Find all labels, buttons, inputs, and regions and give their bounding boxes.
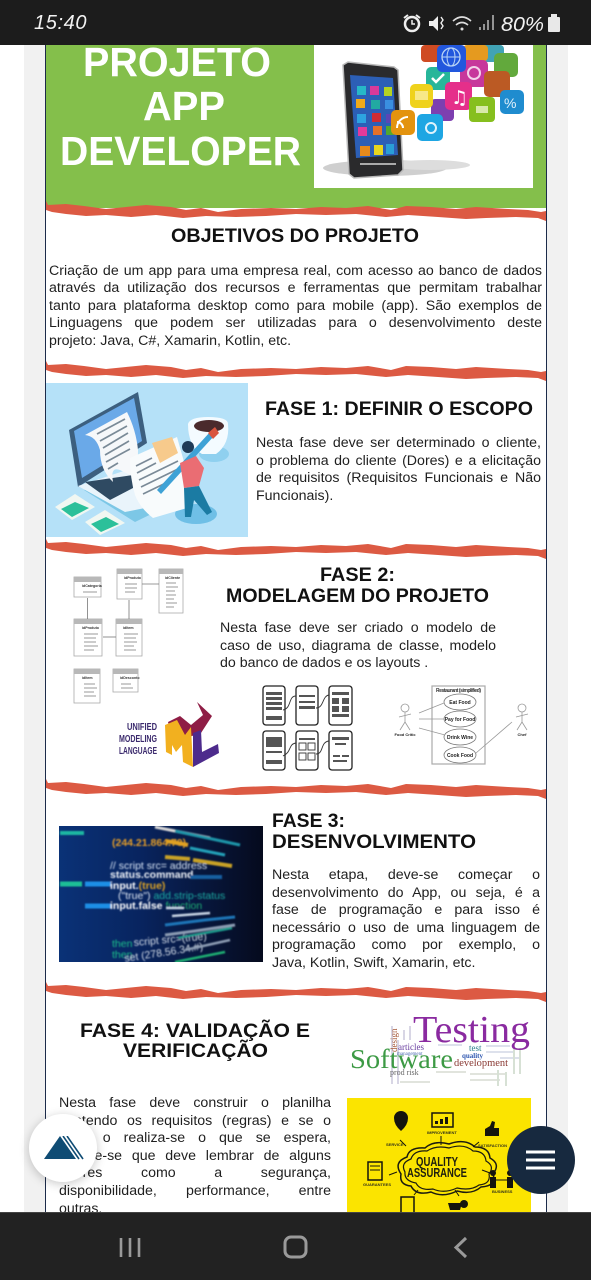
diagram: database tables: idProduto (124, 576, 142, 580)
title: Projeto App Developer: APP (143, 83, 225, 129)
diagram: database tables (74, 568, 184, 704)
image: quality assurance (347, 1098, 531, 1212)
heading: objetivos do projeto: OBJETIVOS DO PROJETO (171, 226, 419, 247)
navigation icons (120, 1236, 467, 1258)
image: quality assurance: SATISFACTION (478, 1143, 507, 1148)
image: quality assurance: QUALITY (416, 1155, 459, 1169)
floating menu button (507, 1126, 575, 1194)
text: fase 4 body: teste o realiza-se o que se espera, (59, 1130, 331, 1146)
text: fase 3 body: necessário o uso de uma linguagem de (272, 920, 540, 936)
image: software testing word cloud: management (397, 1052, 423, 1057)
logo: UML (119, 702, 219, 767)
image: code on screen: status.command (110, 869, 193, 881)
panel: objetivos do projeto (49, 226, 542, 349)
text: fase 1 body: Funcionais). (256, 488, 333, 504)
text: fase 2 body (220, 620, 496, 671)
image: code on screen: ("true") add.strip-status (118, 890, 225, 902)
status icons: 80% (501, 14, 544, 36)
text: fase 3 body (272, 867, 540, 971)
text: fase 3 body: programação como por exemplo, o (272, 937, 540, 953)
image: software testing word cloud: quality (462, 1052, 484, 1060)
image: software testing word cloud: Software (350, 1044, 453, 1074)
heading: fase 2: MODELAGEM DO PROJETO (226, 586, 489, 607)
text: fase 1 body (256, 435, 541, 504)
icon: hamburger menu (526, 1150, 555, 1170)
text: fase 1 body: de requisitos (Requisitos Funcionais e Não (256, 470, 541, 486)
title: Projeto App Developer (60, 45, 301, 170)
image: code on screen: input.false function (110, 900, 202, 912)
text: fase 4 body: lembre-se que deve lembrar de alguns (59, 1148, 331, 1164)
diagram: use case: Food Critic (394, 732, 416, 737)
panel: fase 4 (59, 1014, 531, 1217)
wireframe: phone layouts (262, 685, 353, 771)
diagram: database tables: idCategoria (82, 584, 103, 588)
image: quality assurance: ASSURANCE (407, 1166, 467, 1180)
panel: fase 2 (74, 565, 528, 771)
panel: header (60, 45, 533, 188)
image: quality assurance: SERVICE (386, 1142, 404, 1147)
image: code on screen: input.(true) (110, 880, 165, 892)
heading: fase 3 (272, 811, 476, 853)
icon: triangle logo (44, 1136, 84, 1160)
image: code on screen: script src=(true) (133, 931, 207, 949)
text: fase 2 body: do banco de dados e os layouts . (220, 655, 428, 671)
image: code on screen: // script src= address (110, 860, 207, 872)
diagram: database tables: idItem (123, 626, 134, 630)
image: software testing word cloud: design (389, 1028, 399, 1052)
image: smartphone with app icons: ♫ (451, 87, 468, 109)
panel: fase 1 (46, 383, 541, 537)
text: objetivos body: projeto: Java, C#, Xamarin, Kotlin, etc. (49, 333, 291, 349)
diagram: database tables: idDesconto (120, 676, 140, 680)
diagram: database tables: idCliente (165, 576, 180, 580)
logo: UML: MODELING (119, 734, 157, 745)
illustration: person writing on document over laptop (46, 383, 248, 537)
text: objetivos body: tanto para plataforma desktop como para mobile (app). São exemplos de (49, 298, 542, 314)
image: quality assurance: GUARANTEES (363, 1182, 391, 1187)
image: quality assurance: IMPROVEMENT (427, 1130, 457, 1135)
clock: 15:40 (34, 12, 87, 34)
heading: fase 4: VERIFICAÇÃO (123, 1040, 268, 1062)
image: software testing word cloud: test (469, 1043, 482, 1053)
text: fase 1 body: o problema do cliente (Dores) e a elicitação (256, 453, 541, 469)
image: smartphone with app icons: % (504, 95, 516, 111)
diagram: use case: Restaurant (simplified) (436, 688, 481, 694)
text: fase 4 body: contendo os requisitos (regras) e se o (59, 1113, 331, 1129)
text: objetivos body: Criação de um app para uma empresa real, com acesso ao banco de dados (49, 262, 542, 278)
text: fase 2 body: Nesta fase deve ser criado o modelo de (220, 620, 496, 636)
logo: UML: LANGUAGE (119, 746, 157, 757)
text: fase 4 body: outras. (59, 1201, 102, 1217)
heading: fase 2: FASE 2: (320, 565, 395, 586)
diagram: use case: Cook Food (447, 753, 473, 759)
image: code on screen: (244.21.864.70) (112, 837, 186, 849)
text: fase 2 body: caso de uso, diagrama de classe, modelo (220, 638, 496, 654)
diagram: database tables: idItem (82, 676, 93, 680)
image: software testing word cloud: prod risk (390, 1068, 419, 1077)
image: software testing word cloud (350, 1014, 530, 1086)
text: fase 3 body: fase de programação e para isso é (272, 902, 540, 918)
image: quality assurance: BUSINESS (492, 1189, 513, 1194)
heading: fase 1: FASE 1: DEFINIR O ESCOPO (265, 399, 533, 420)
diagram: use case: Chef (518, 732, 527, 737)
panel: fase 3 (59, 811, 540, 971)
text: fase 3 body: desenvolvimento do App, ou seja, é a (272, 885, 540, 901)
image: software testing word cloud: articles (398, 1042, 424, 1052)
text: objetivos body: Linguagens que podem ser utilizadas para o desenvolvimento deste (49, 315, 542, 331)
status bar (0, 0, 591, 45)
image: code on screen: then (112, 938, 133, 950)
text: fase 4 body: Nesta fase deve construir o planilha (59, 1095, 331, 1111)
diagram: use case (394, 685, 528, 765)
text: objetivos body: através da utilização dos recursos e ferramentas que permitam trabalhar (49, 280, 542, 296)
floating logo button (29, 1114, 97, 1182)
diagram: use case: Drink Wine (447, 735, 473, 741)
heading: fase 4 (80, 1020, 310, 1062)
text: fase 4 body: fatores como a segurança, (59, 1165, 331, 1181)
diagram: database tables: idProduto (82, 626, 100, 630)
heading: fase 2 (226, 565, 489, 607)
image: software testing word cloud: development (454, 1057, 508, 1069)
logo: UML: UNIFIED (127, 722, 157, 733)
diagram: use case: Pay for Food (445, 717, 475, 723)
image: code on screen: then (112, 949, 133, 961)
text: fase 3 body: Nesta etapa, deve-se começar o (272, 867, 540, 883)
heading: fase 4: FASE 4: VALIDAÇÃO E (80, 1020, 310, 1042)
heading: fase 3: FASE 3: (272, 811, 345, 832)
heading: fase 3: DESENVOLVIMENTO (272, 832, 476, 853)
text: fase 3 body: Java, Kotlin, Swift, Xamarin, etc. (272, 955, 475, 971)
navigation bar (0, 1212, 591, 1280)
text: fase 4 body (59, 1095, 331, 1217)
diagram: use case: Eat Food (449, 700, 471, 706)
text: fase 4 body: disponibilidade, performance, entre (59, 1183, 331, 1199)
text: fase 1 body: Nesta fase deve ser determinado o cliente, (256, 435, 541, 451)
text: objetivos body (49, 262, 542, 349)
image: code on screen (59, 826, 263, 962)
status icons (404, 14, 560, 36)
image: smartphone with app icons (314, 45, 533, 188)
